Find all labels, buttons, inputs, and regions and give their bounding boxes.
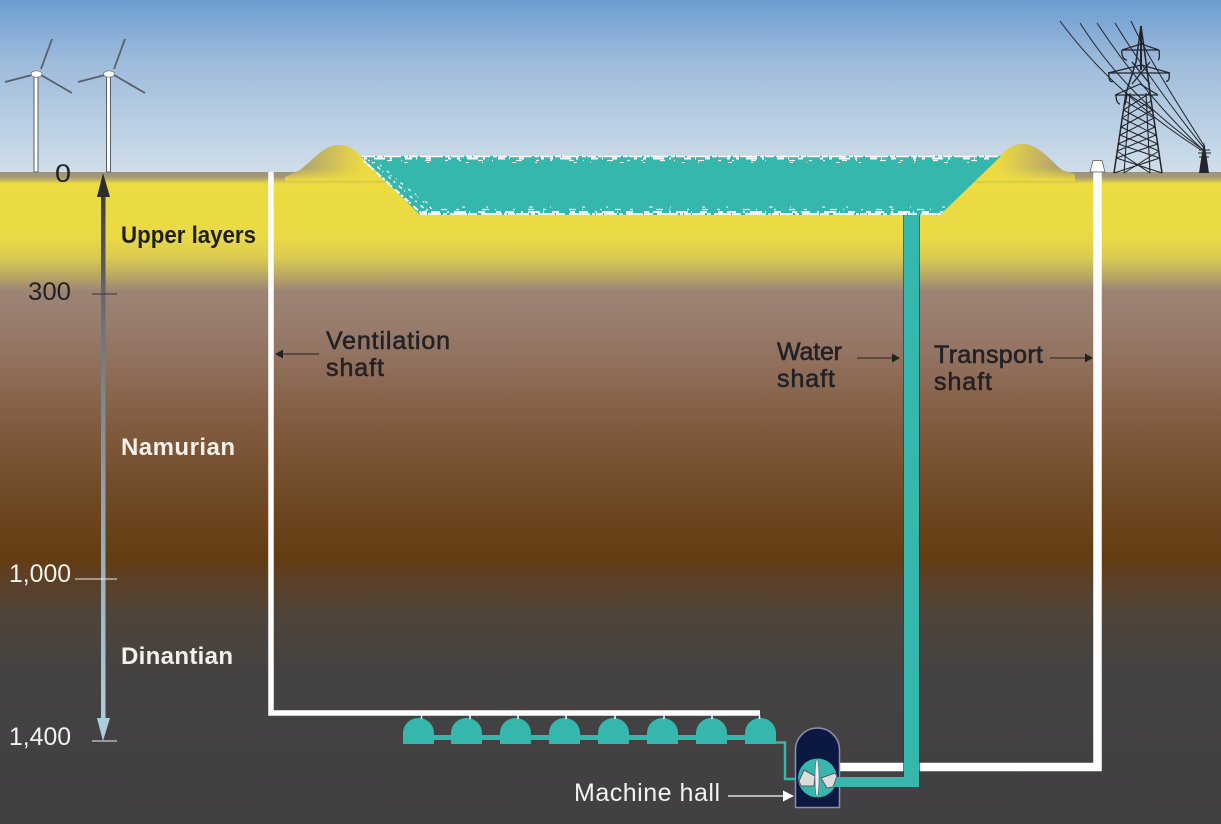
label: ventilation shaft <box>326 327 450 382</box>
depth ticks <box>92 293 117 295</box>
left embankment <box>285 145 385 181</box>
transport shaft <box>840 160 1105 767</box>
label: water shaft: shaft <box>777 365 835 393</box>
depth label 300: 300 <box>28 278 71 306</box>
chamber outlet pipe <box>776 742 802 779</box>
arrow: ventilation shaft <box>275 350 319 358</box>
layer label: Namurian: Namurian <box>121 434 235 461</box>
water shaft <box>835 215 920 788</box>
power lines <box>1060 21 1205 150</box>
label: ventilation shaft: Ventilation <box>326 327 450 355</box>
electricity pylon <box>1108 26 1170 173</box>
wind turbine 2 <box>78 39 145 172</box>
label: ventilation shaft: shaft <box>326 354 384 382</box>
underground reservoir chambers <box>403 718 776 744</box>
wind turbine 1 <box>5 39 72 172</box>
layer label: Dinantian: Dinantian <box>121 643 233 670</box>
label: water shaft: Water <box>777 338 842 366</box>
depth axis arrow <box>97 173 110 741</box>
chamber vent ticks <box>422 715 760 719</box>
ground strata <box>0 172 1221 824</box>
layer label: upper layers: Upper layers <box>121 222 256 249</box>
depth label 1,400: 1,400 <box>9 723 71 751</box>
label: transport shaft: Transport <box>934 341 1043 369</box>
label: machine hall: Machine hall <box>574 779 720 807</box>
label: transport shaft: shaft <box>934 368 992 396</box>
machine hall <box>796 728 842 808</box>
upper reservoir <box>361 156 1001 215</box>
depth label 0: 0 <box>55 160 71 188</box>
arrow: water shaft <box>857 354 900 362</box>
right embankment <box>975 144 1075 181</box>
ventilation shaft <box>271 172 760 713</box>
label: transport shaft <box>934 341 1043 396</box>
depth label 1,000: 1,000 <box>9 560 71 588</box>
sky background <box>0 0 1221 173</box>
small distant pylon <box>1198 142 1211 173</box>
label: water shaft <box>777 338 842 393</box>
arrow: transport shaft <box>1050 354 1093 362</box>
arrow: machine hall <box>728 790 794 802</box>
